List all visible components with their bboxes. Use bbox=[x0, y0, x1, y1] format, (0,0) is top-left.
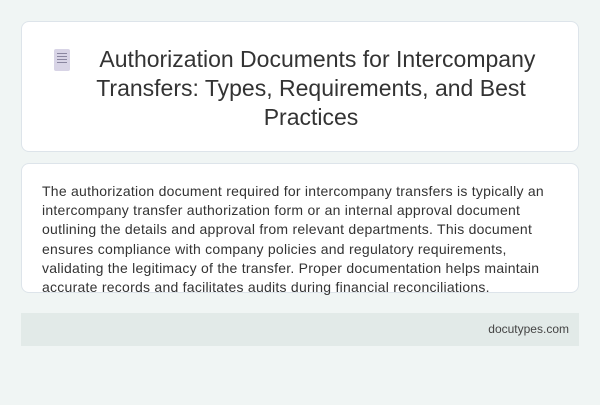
panel: title card bbox=[21, 21, 579, 152]
text block: outlining the details and approval from relevant departments. This document bbox=[42, 221, 532, 237]
text block: intercompany transfer authorization form or an internal approval document bbox=[42, 202, 520, 218]
footer text: docutypes.com bbox=[488, 322, 569, 336]
title: Authorization Documents for Intercompany Transfers: Types, Requirements, and Best Practices bbox=[96, 46, 535, 130]
text block: ensures compliance with company policies and regulatory requirements, bbox=[42, 241, 507, 257]
text block bbox=[42, 183, 544, 295]
text block: The authorization document required for intercompany transfers is typically an bbox=[42, 183, 544, 199]
text block: validating the legitimacy of the transfer. Proper documentation helps maintain bbox=[42, 260, 539, 276]
footer bar bbox=[21, 313, 579, 346]
text block: accurate records and facilitates audits during financial reconciliations. bbox=[42, 279, 490, 295]
panel: description bbox=[21, 163, 579, 293]
icon: document bbox=[54, 49, 70, 71]
